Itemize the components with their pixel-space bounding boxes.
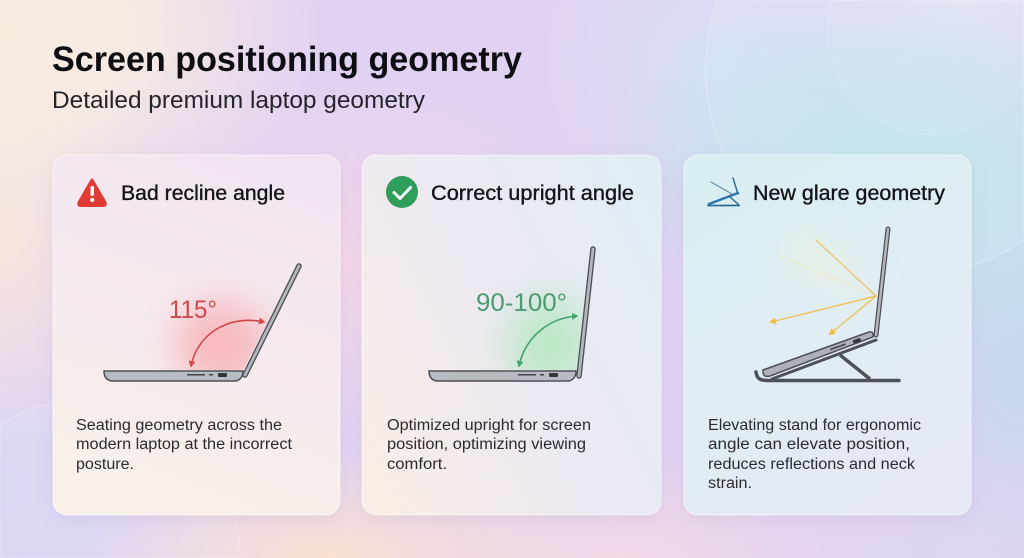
- description: Optimized upright for screen: [387, 417, 591, 434]
- panel: bad recline angle: [53, 155, 340, 515]
- laptop: upright: [429, 249, 593, 381]
- heading: new glare geometry: New glare geometry: [753, 182, 946, 205]
- description: Seating geometry across the: [76, 417, 282, 434]
- panel: correct upright angle: [362, 155, 661, 515]
- glow: green angle zone: [506, 297, 594, 393]
- icon: laptop stand: [708, 178, 739, 206]
- glare rays: [771, 240, 876, 334]
- subtitle: Detailed premium laptop geometry: [52, 87, 425, 114]
- heading: bad recline angle: Bad recline angle: [121, 182, 285, 205]
- description: strain.: [708, 475, 752, 492]
- description: modern laptop at the incorrect: [76, 436, 293, 453]
- description: position, optimizing viewing: [387, 436, 586, 453]
- angle label: 115°: [169, 296, 217, 324]
- description: posture.: [76, 456, 134, 473]
- angle label: 90-100°: [476, 289, 567, 317]
- description: Elevating stand for ergonomic: [708, 417, 921, 434]
- icon: warning triangle: [79, 180, 105, 206]
- glare light glow: [778, 236, 876, 296]
- angle arc and arrows: [519, 316, 577, 366]
- angle arc and arrows: [191, 320, 264, 366]
- description: angle can elevate position,: [708, 436, 910, 453]
- icon: check mark: [386, 176, 418, 208]
- laptop on stand: [756, 229, 899, 380]
- laptop: reclined: [104, 266, 299, 381]
- heading: correct upright angle: Correct upright angle: [431, 182, 634, 205]
- panel: new glare geometry: [684, 155, 971, 515]
- description: reduces reflections and neck: [708, 456, 915, 473]
- title: Screen positioning geometry: [52, 39, 522, 79]
- glow: red angle zone: [174, 301, 270, 389]
- description: comfort.: [387, 456, 447, 473]
